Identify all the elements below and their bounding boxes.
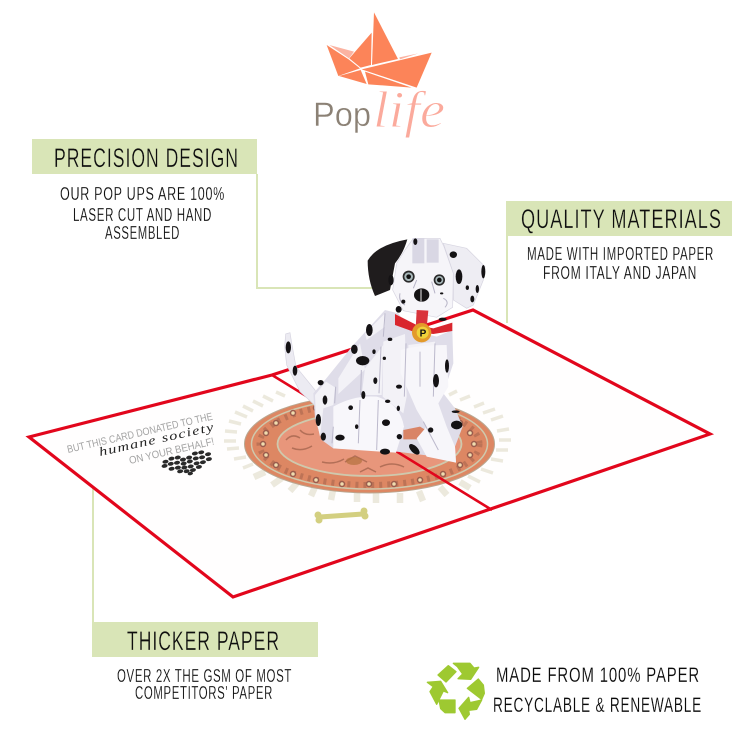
wordmark: life: life	[373, 82, 445, 139]
dog forehead fold panels	[412, 238, 439, 263]
text: precision design description: LASER CUT AND HAND	[73, 205, 212, 225]
dog nose	[414, 288, 429, 302]
dog haunch	[333, 396, 404, 453]
rug tassels	[224, 391, 511, 503]
dog spots	[286, 238, 485, 456]
dog tongue	[416, 310, 428, 328]
banner: precision design	[32, 139, 257, 174]
panel: recyclable note	[427, 663, 702, 719]
text: card message: ON YOUR BEHALF!	[128, 436, 215, 467]
connector: thicker paper	[92, 487, 94, 622]
panel: thicker paper	[92, 622, 318, 703]
dog tail	[285, 333, 320, 410]
text: precision design description: ASSEMBLED	[105, 223, 180, 243]
center fold line	[272, 375, 492, 510]
text: card message: humane society	[98, 420, 216, 459]
pop-up card	[29, 310, 710, 597]
rug	[244, 395, 494, 493]
icon: origami boat	[327, 12, 432, 88]
heading: precision design: PRECISION DESIGN	[54, 143, 239, 173]
dog muzzle folds	[400, 280, 447, 307]
panel: quality materials	[506, 201, 732, 283]
dog collar tag	[412, 323, 431, 342]
dog body silhouette	[313, 310, 463, 463]
dog body slats	[315, 313, 435, 437]
text: quality materials description	[527, 244, 714, 283]
dog front legs	[401, 345, 456, 463]
icon: spotted heart	[160, 449, 214, 480]
text: thicker paper description: OVER 2X THE GSM OF MOST	[117, 666, 292, 686]
text: card message: BUT THIS CARD DONATED TO THE	[66, 411, 214, 456]
card sheet with red border	[29, 310, 710, 597]
text: card message	[66, 411, 216, 467]
text: made from paper	[493, 664, 702, 717]
dalmatian pop-up	[285, 238, 485, 463]
dog collar tag: P	[420, 328, 427, 339]
dog rug gap between legs	[403, 427, 428, 439]
banner: thicker paper	[92, 622, 318, 657]
banner: quality materials	[506, 201, 732, 236]
connector: precision design	[257, 174, 372, 288]
icon: recycle symbol	[427, 663, 484, 719]
logo: Poplife paper boat	[313, 12, 445, 139]
dog head	[393, 238, 453, 317]
text: thicker paper description	[117, 666, 292, 703]
text: precision design description: OUR POP UPS ARE 100%	[60, 184, 225, 204]
dog ear: right	[443, 243, 485, 308]
connector: quality materials	[506, 236, 508, 323]
dog fold lines	[332, 313, 438, 450]
dog collar	[395, 314, 452, 334]
dog ear: black	[368, 239, 407, 296]
panel: precision design	[32, 139, 257, 243]
text: thicker paper description: COMPETITORS' PAPER	[135, 683, 273, 703]
dog eyes	[403, 271, 445, 286]
icon: gold bone	[315, 508, 368, 523]
heading: thicker paper: THICKER PAPER	[127, 626, 280, 656]
text: precision design description	[60, 184, 225, 243]
wordmark: Pop: Pop	[313, 96, 371, 134]
